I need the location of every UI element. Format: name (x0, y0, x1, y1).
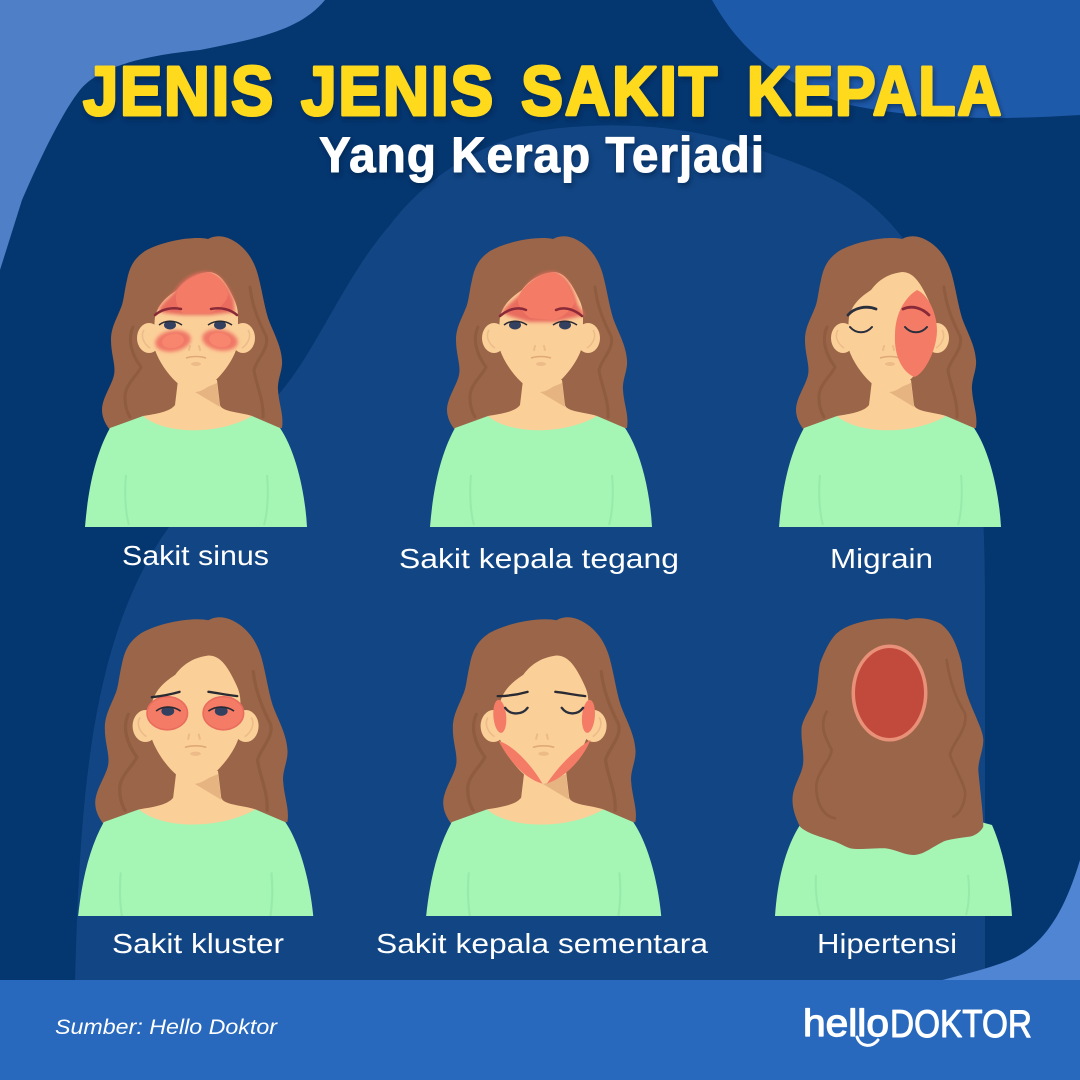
figure: sakit kepala tegang (430, 236, 652, 527)
pain: right temple (582, 700, 595, 733)
label: migrain: Migrain (830, 543, 933, 574)
hair (792, 618, 983, 855)
figure: sakit kepala sementara (425, 617, 662, 928)
footer band (0, 980, 1080, 1080)
brows (498, 692, 585, 696)
pain: right jaw (547, 740, 591, 784)
pain: right eye ring (203, 697, 244, 730)
title: KEPALA (747, 52, 1003, 130)
pain: forehead core (176, 272, 228, 313)
logo: hello doktor (803, 1003, 1032, 1046)
brows (152, 692, 237, 697)
figure: migrain (779, 236, 1001, 527)
title (83, 52, 1003, 130)
pain: left cheek (153, 328, 193, 354)
closed eyes (505, 708, 583, 713)
brows (155, 308, 237, 315)
pain: right cheek (200, 327, 240, 353)
background shape: bottom right (935, 860, 1080, 982)
closed eyes (850, 327, 927, 332)
title: SAKIT (521, 52, 719, 130)
pain: left eye ring (147, 697, 188, 730)
brows (500, 308, 582, 316)
hair strands (816, 660, 965, 818)
sweater (775, 815, 1012, 916)
background shape: top right (712, 0, 1080, 118)
pain: half face (895, 290, 937, 377)
pain: crown core (855, 648, 924, 738)
pain: crown halo (852, 644, 928, 742)
label: hipertensi: Hipertensi (817, 928, 957, 959)
title: JENIS (83, 52, 275, 130)
background shape: top left (0, 0, 325, 270)
pain: right cheek core (208, 331, 232, 349)
label: sakit kepala tegang: Sakit kepala tegang (399, 543, 679, 574)
brows (848, 307, 876, 315)
pain: forehead halo (158, 272, 235, 315)
subtitle: Yang Kerap Terjadi (319, 127, 765, 183)
figure: sakit kluster (77, 617, 314, 928)
logo word: doktor: DOKTOR (890, 1003, 1032, 1046)
pain: forehead and brows halo (502, 272, 585, 322)
title: JENIS (301, 52, 495, 130)
pain: forehead core (518, 272, 575, 320)
label: sakit kepala sementara: Sakit kepala sementara (376, 928, 708, 959)
label: sakit kluster: Sakit kluster (112, 928, 284, 959)
source line: Sumber: Hello Doktor (55, 1016, 278, 1039)
logo word: hello: hello (803, 1003, 889, 1045)
pain: left cheek core (161, 332, 185, 350)
figure: sakit sinus (85, 236, 307, 527)
pain: left temple (493, 700, 506, 733)
logo icon: stethoscope (857, 1037, 878, 1045)
pain: left jaw (499, 741, 543, 784)
background shape: center (75, 125, 985, 980)
label: sakit sinus: Sakit sinus (122, 540, 269, 571)
figure: hipertensi (back of head) (775, 618, 1012, 916)
